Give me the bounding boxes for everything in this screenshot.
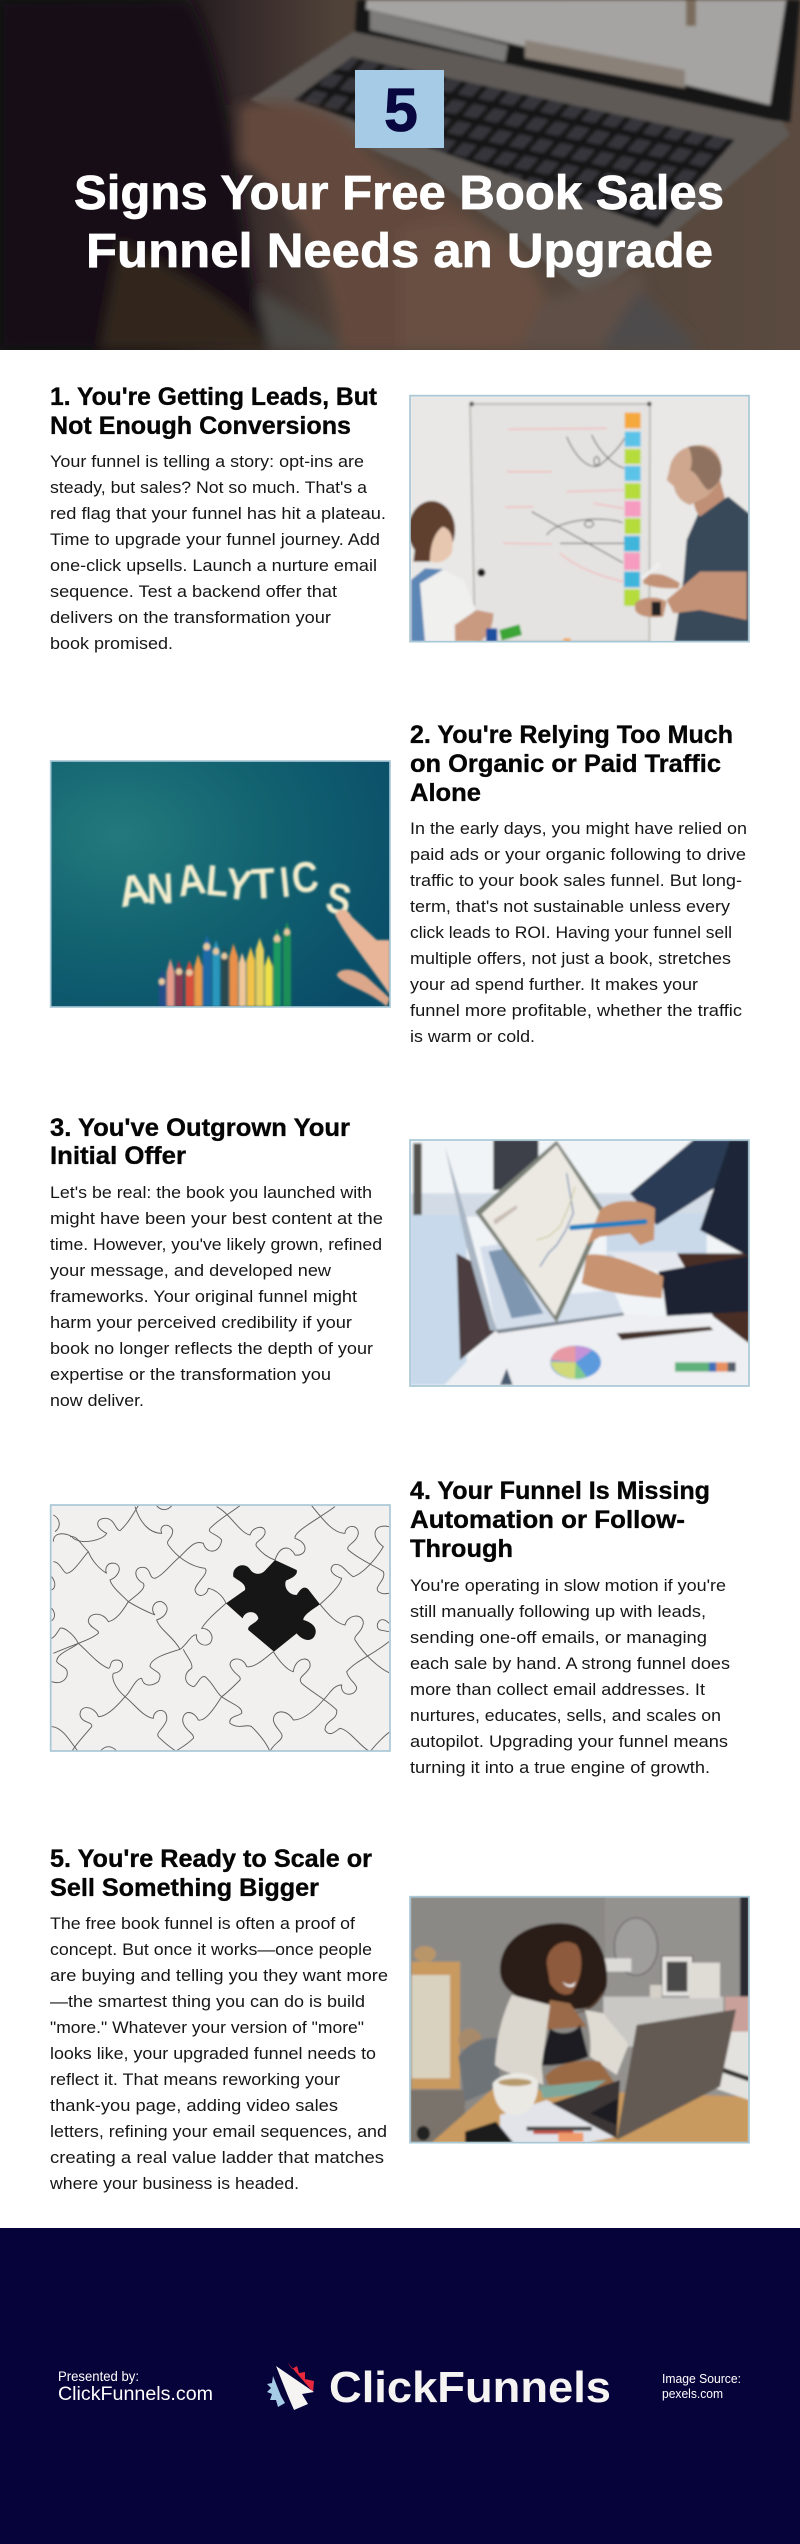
- clickfunnels wordmark: ClickFunnels: [329, 2363, 611, 2412]
- body text: sign 4: more than collect email addresses. It: [410, 1680, 705, 1699]
- body text: sign 3: your message, and developed new: [50, 1261, 332, 1280]
- photo: analytics letters and coloured pencils: C: [289, 852, 321, 903]
- heading: sign 2: 2. You're Relying Too Much: [410, 721, 733, 749]
- image source credit: pexels.com: [662, 2386, 723, 2401]
- photo: analytics letters and coloured pencils: I: [278, 858, 292, 907]
- body text: sign 2: funnel more profitable, whether the traffic: [410, 1001, 743, 1020]
- body text: sign 3: [50, 1183, 383, 1410]
- heading: sign 2: Alone: [410, 779, 481, 807]
- body text: sign 2: traffic to your book sales funnel. But long-: [410, 871, 742, 890]
- presented by credit: [58, 2368, 213, 2405]
- body text: sign 4: sending one-off emails, or managing: [410, 1628, 707, 1647]
- title: Funnel Needs an Upgrade: [86, 225, 713, 278]
- body text: sign 4: still manually following up with leads,: [410, 1602, 706, 1621]
- heading: sign 4: [410, 1477, 710, 1563]
- photo: jigsaw puzzle with a missing black piece: [50, 1504, 391, 1752]
- photo: analytics letters and coloured pencils: S: [322, 873, 355, 925]
- body text: sign 3: Let's be real: the book you launched with: [50, 1183, 372, 1202]
- image source credit: Image Source:: [662, 2371, 741, 2386]
- body text: sign 3: expertise or the transformation you: [50, 1365, 331, 1384]
- heading: sign 4: 4. Your Funnel Is Missing: [410, 1477, 710, 1505]
- heading: sign 3: 3. You've Outgrown Your: [50, 1114, 350, 1142]
- body text: sign 4: You're operating in slow motion if you're: [410, 1576, 726, 1595]
- body text: sign 5: concept. But once it works—once people: [50, 1940, 372, 1959]
- body text: sign 3: might have been your best content at the: [50, 1209, 383, 1228]
- body text: sign 1: [50, 452, 386, 653]
- body text: sign 1: sequence. Test a backend offer that: [50, 582, 337, 601]
- heading: sign 1: Not Enough Conversions: [50, 412, 351, 440]
- number badge: 5: [384, 76, 418, 144]
- heading: sign 3: Initial Offer: [50, 1142, 186, 1170]
- footer: [0, 2228, 800, 2544]
- body text: sign 5: The free book funnel is often a proof of: [50, 1914, 355, 1933]
- body text: sign 1: book promised.: [50, 634, 173, 653]
- presented by credit: Presented by:: [58, 2368, 139, 2384]
- body text: sign 4: each sale by hand. A strong funnel does: [410, 1654, 730, 1673]
- background photo: laptop on a desk: [0, 0, 800, 350]
- heading: sign 3: [50, 1114, 350, 1170]
- photo: analytics letters and coloured pencils: [50, 760, 391, 1008]
- body text: sign 4: nurtures, educates, sells, and scales on: [410, 1706, 721, 1725]
- body text: sign 5: looks like, your upgraded funnel needs to: [50, 2044, 376, 2063]
- photo: analytics letters and coloured pencils: N: [146, 864, 174, 914]
- heading: sign 2: on Organic or Paid Traffic: [410, 750, 721, 778]
- body text: sign 5: "more." Whatever your version of "more": [50, 2018, 364, 2037]
- heading: sign 2: [410, 721, 733, 807]
- body text: sign 5: creating a real value ladder that matches: [50, 2148, 384, 2167]
- body text: sign 4: autopilot. Upgrading your funnel means: [410, 1732, 728, 1751]
- panel: sign 4: [51, 1477, 730, 1777]
- heading: sign 4: Through: [410, 1535, 513, 1563]
- body text: sign 3: frameworks. Your original funnel might: [50, 1287, 357, 1306]
- body text: sign 3: harm your perceived credibility if your: [50, 1313, 352, 1332]
- panel: sign 1: [50, 383, 749, 653]
- image source credit: [662, 2371, 741, 2401]
- heading: sign 5: Sell Something Bigger: [50, 1874, 319, 1902]
- body text: sign 2: multiple offers, not just a book, stretches: [410, 949, 731, 968]
- heading: sign 1: [50, 383, 378, 440]
- body text: sign 2: [410, 819, 747, 1046]
- heading: sign 1: 1. You're Getting Leads, But: [50, 383, 378, 411]
- body text: sign 5: [49, 1914, 388, 2193]
- body text: sign 3: time. However, you've likely grown, refined: [50, 1235, 382, 1254]
- body text: sign 3: book no longer reflects the depth of your: [50, 1339, 373, 1358]
- body text: sign 3: now deliver.: [50, 1391, 144, 1410]
- photo: two people at a whiteboard: [409, 394, 750, 642]
- panel: sign 5: [49, 1845, 749, 2193]
- body text: sign 2: In the early days, you might have relied on: [410, 819, 747, 838]
- body text: sign 1: red flag that your funnel has hit a plateau.: [50, 504, 386, 523]
- title: [74, 167, 724, 278]
- photo: analytics letters and coloured pencils: L: [204, 856, 231, 906]
- body text: sign 2: click leads to ROI. Having your funnel sell: [410, 923, 732, 942]
- heading: sign 5: 5. You're Ready to Scale or: [50, 1845, 372, 1873]
- panel: sign 2: [51, 721, 747, 1046]
- body text: sign 5: reflect it. That means reworking your: [50, 2070, 340, 2089]
- panel: sign 3: [50, 1114, 749, 1410]
- presented by credit: ClickFunnels.com: [58, 2384, 213, 2405]
- icon: clickfunnels logo mark: [267, 2362, 314, 2410]
- heading: sign 4: Automation or Follow-: [410, 1506, 685, 1534]
- body text: sign 1: delivers on the transformation your: [50, 608, 331, 627]
- body text: sign 4: [410, 1576, 730, 1777]
- body text: sign 2: term, that's not sustainable unless every: [410, 897, 731, 916]
- photo: woman smiling at a laptop: [409, 1896, 750, 2144]
- photo: analytics letters and coloured pencils: A: [114, 864, 154, 917]
- body text: sign 1: one-click upsells. Launch a nurture email: [50, 556, 377, 575]
- body text: sign 2: your ad spend further. It makes your: [410, 975, 698, 994]
- photo: business people reviewing charts on a laptop: [409, 1139, 750, 1387]
- photo: analytics letters and coloured pencils: Y: [222, 859, 255, 910]
- body text: sign 4: turning it into a true engine of growth.: [410, 1758, 710, 1777]
- body text: sign 5: —the smartest thing you can do is build: [50, 1992, 365, 2011]
- body text: sign 1: Time to upgrade your funnel journey. Add: [50, 530, 380, 549]
- header banner: [0, 0, 800, 350]
- number badge: [355, 70, 444, 148]
- title: Signs Your Free Book Sales: [74, 167, 724, 220]
- body text: sign 1: Your funnel is telling a story: opt-ins are: [50, 452, 364, 471]
- body text: sign 2: paid ads or your organic following to drive: [410, 845, 746, 864]
- photo: analytics letters and coloured pencils: A: [174, 854, 209, 906]
- body text: sign 2: is warm or cold.: [410, 1027, 535, 1046]
- body text: sign 5: are buying and telling you they want more: [50, 1966, 388, 1985]
- body text: sign 1: steady, but sales? Not so much. That's a: [50, 478, 368, 497]
- body text: sign 5: letters, refining your email sequences, and: [50, 2122, 387, 2141]
- body text: sign 5: thank-you page, adding video sales: [50, 2096, 338, 2115]
- photo: analytics letters and coloured pencils: T: [250, 859, 276, 908]
- body text: sign 5: where your business is headed.: [49, 2174, 299, 2193]
- heading: sign 5: [50, 1845, 372, 1902]
